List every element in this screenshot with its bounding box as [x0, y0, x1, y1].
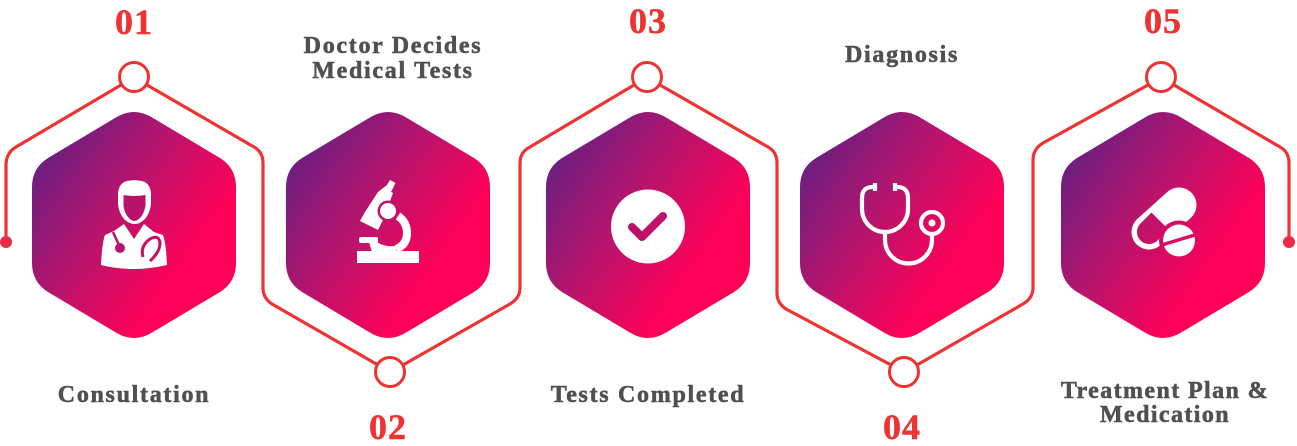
icon: doctor	[101, 180, 167, 269]
hexagon 4	[800, 112, 1004, 338]
hexagon 2	[286, 112, 490, 338]
step number 05: 05	[1144, 1, 1182, 41]
icon: stethoscope	[862, 183, 943, 264]
step number 03: 03	[629, 1, 667, 41]
icon: microscope	[357, 180, 419, 263]
step number 02: 02	[369, 407, 407, 446]
node circle 1	[120, 62, 148, 92]
node circle 5	[1146, 62, 1176, 92]
icon: check mark	[611, 190, 685, 264]
connector line	[0, 85, 1295, 365]
label: Tests Completed: Tests Completed	[551, 382, 745, 408]
node circle 3	[632, 62, 662, 92]
hexagon 1	[32, 112, 236, 338]
icon: pills	[1149, 205, 1195, 256]
label: Diagnosis: Diagnosis	[845, 42, 959, 68]
node circle 2	[376, 358, 404, 386]
label: Doctor Decides Medical Tests: Medical Tests	[312, 58, 474, 84]
label: Consultation: Consultation	[58, 382, 210, 408]
hexagon 3	[546, 112, 750, 338]
node circle 4	[890, 358, 918, 386]
hexagon 5	[1061, 112, 1265, 338]
step number 04: 04	[883, 407, 921, 446]
label: Doctor Decides Medical Tests: Doctor Decides	[304, 33, 482, 59]
label: Treatment Plan & Medication: Medication	[1100, 402, 1230, 428]
label: Treatment Plan & Medication: Treatment Plan &	[1061, 378, 1269, 404]
step number 01: 01	[115, 2, 153, 42]
